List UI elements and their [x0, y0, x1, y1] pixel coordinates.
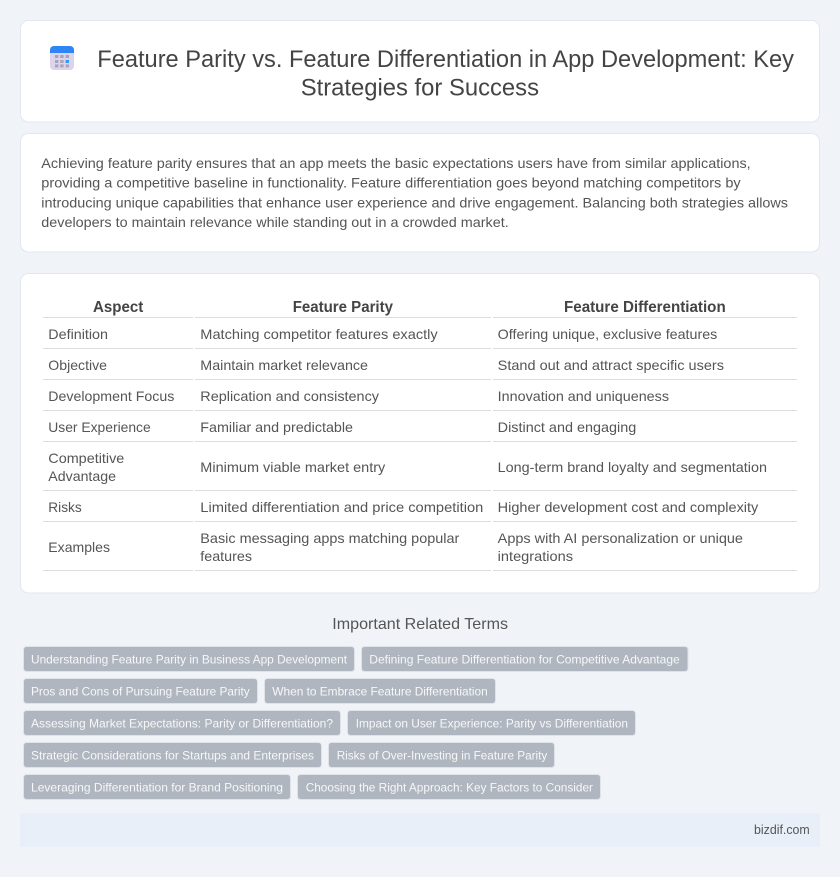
table row: examples: Examples [48, 539, 110, 555]
table row: examples: integrations [498, 548, 573, 564]
related terms tag list [24, 646, 688, 800]
tag [264, 678, 496, 704]
tag [24, 774, 290, 800]
table row: definition: Definition [48, 326, 108, 342]
table row: development focus: Replication and consistency [200, 388, 379, 404]
table row: risks: Limited differentiation and price competition [200, 499, 483, 515]
text block: intro paragraph: Achieving feature parity ensures that an app meets the basic expectations users have from similar applications, [41, 155, 751, 171]
table row: user experience: Distinct and engaging [498, 419, 636, 435]
heading: page title: Feature Parity vs. Feature Differentiation in App Development: Key [97, 46, 794, 73]
text block: intro paragraph [41, 155, 788, 230]
tag: Understanding Feature Parity in Business App Development [31, 652, 348, 666]
table row: user experience [48, 419, 636, 435]
table row: examples: features [200, 548, 252, 564]
table row: competitive advantage: Minimum viable market entry [200, 459, 385, 475]
panel: title header [20, 20, 820, 122]
panel: introduction [20, 134, 820, 252]
table row: risks [48, 499, 758, 515]
tag: Leveraging Differentiation for Brand Positioning [31, 780, 283, 794]
table row: development focus: Innovation and uniqueness [498, 388, 669, 404]
tag: Pros and Cons of Pursuing Feature Parity [31, 684, 250, 698]
tag [348, 710, 636, 736]
table row: objective: Maintain market relevance [200, 357, 368, 373]
icon: calendar [50, 46, 74, 70]
table row: examples: Basic messaging apps matching popular [200, 530, 460, 546]
tag: Choosing the Right Approach: Key Factors to Consider [306, 780, 593, 794]
tag: Assessing Market Expectations: Parity or Differentiation? [31, 716, 333, 730]
heading: page title [97, 46, 794, 102]
table row: objective: Stand out and attract specific users [498, 357, 724, 373]
table row: competitive advantage: Long-term brand loyalty and segmentation [498, 459, 767, 475]
table row: competitive advantage: Competitive [48, 450, 125, 466]
table header row [93, 299, 726, 316]
table header row: Aspect [93, 299, 144, 316]
table header row: Feature Differentiation [564, 299, 726, 316]
table row: risks: Higher development cost and complexity [498, 499, 758, 515]
text block: intro paragraph: developers to maintain relevance while standing out in a crowded market. [41, 214, 509, 230]
table row: competitive advantage [48, 450, 767, 484]
heading: page title: Strategies for Success [301, 74, 539, 102]
tag [298, 774, 600, 800]
table row: risks: Risks [48, 499, 82, 515]
tag: Impact on User Experience: Parity vs Differentiation [356, 716, 628, 730]
table row: definition: Matching competitor features exactly [200, 326, 438, 342]
table row: competitive advantage: Advantage [48, 468, 116, 484]
table row: examples: Apps with AI personalization or unique [498, 530, 743, 546]
tag: Strategic Considerations for Startups and Enterprises [31, 748, 314, 762]
table row: objective [48, 357, 724, 373]
table header row: Feature Parity [293, 299, 393, 316]
tag [24, 646, 354, 672]
text block: intro paragraph: introducing unique capabilities that enhance user experience and drive engagement. Balancing both strategies allows [41, 194, 788, 210]
tag [24, 710, 340, 736]
tag: Defining Feature Differentiation for Competitive Advantage [369, 652, 680, 666]
footer source text: bizdif.com [754, 822, 810, 837]
table row: development focus [48, 388, 669, 404]
footer band [20, 813, 820, 847]
table row: definition [48, 326, 717, 342]
table row: development focus: Development Focus [48, 388, 174, 404]
tag [24, 742, 322, 768]
heading: important related terms: Important Related Terms [332, 616, 508, 633]
table row: definition: Offering unique, exclusive features [498, 326, 717, 342]
tag [328, 742, 554, 768]
table row: user experience: Familiar and predictable [200, 419, 353, 435]
panel: comparison table [20, 274, 820, 593]
table row: examples [48, 530, 743, 564]
tag [362, 646, 688, 672]
table row: objective: Objective [48, 357, 107, 373]
tag: When to Embrace Feature Differentiation [272, 684, 488, 698]
tag [24, 678, 258, 704]
text block: intro paragraph: providing a competitive baseline in functionality. Feature differentiation goes beyond matching competitors by [41, 175, 741, 191]
table row: user experience: User Experience [48, 419, 151, 435]
tag: Risks of Over-Investing in Feature Parity [337, 748, 547, 762]
